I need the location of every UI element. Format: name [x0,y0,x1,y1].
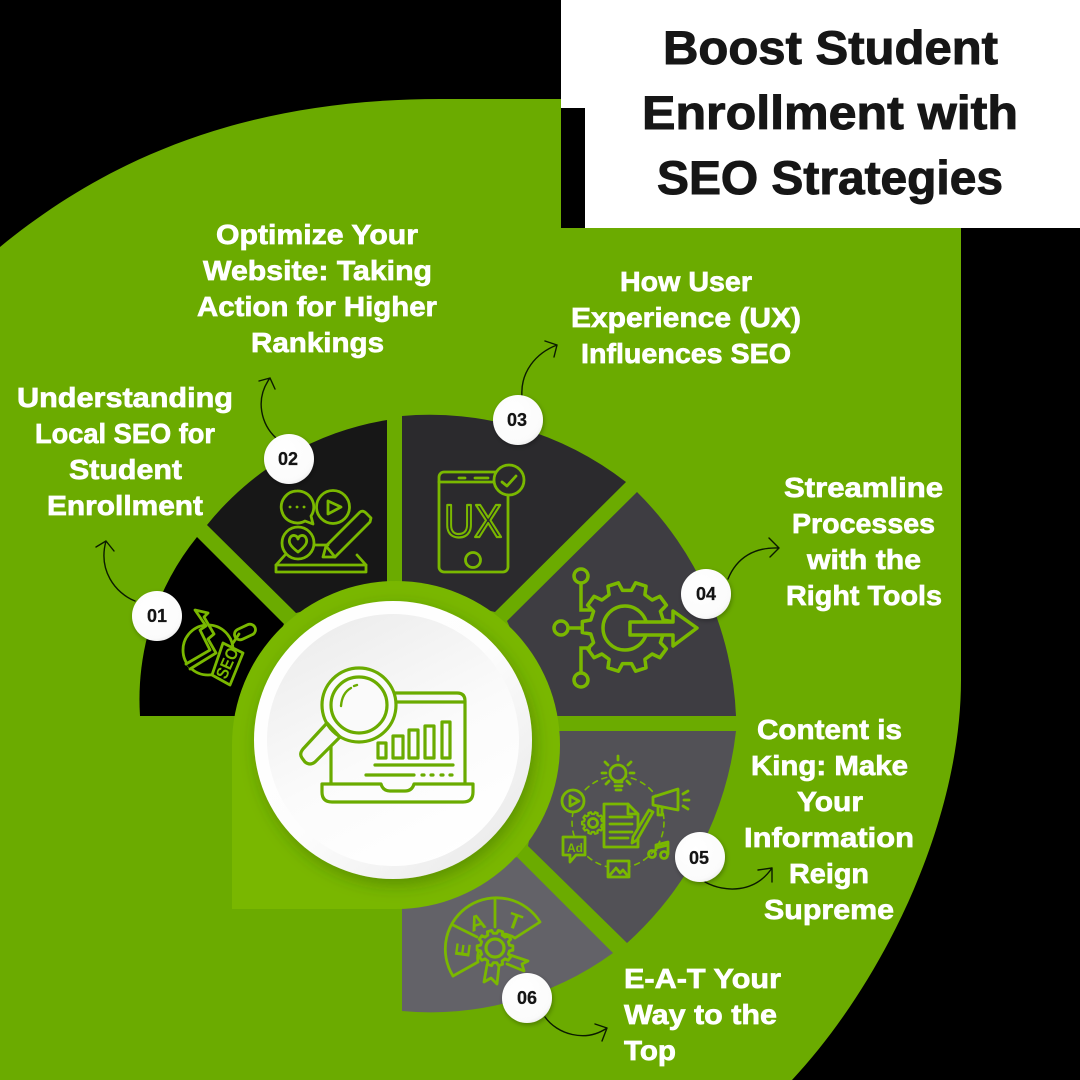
label 01: Enrollment [47,490,203,521]
label 03: How User [620,266,752,297]
label 03: Experience (UX) [571,302,801,333]
segment 06 [402,857,613,1012]
badge 01 [132,591,182,641]
label 01: Understanding [17,382,233,413]
badge 04: 04 [696,584,716,604]
label 05: Supreme [764,894,894,925]
arrow 05 [705,868,772,889]
icon: SEO growth [183,610,257,685]
label 04 [784,472,943,611]
label 01 [17,382,233,521]
icon: content marketing: Ad [567,841,583,855]
arrow 06 [545,1017,607,1041]
icon: content marketing [562,756,689,877]
label 06: Top [624,1035,676,1066]
title panel [561,0,1080,228]
label 05: Your [797,786,863,817]
icon: social content [276,490,371,572]
label 05: Information [744,822,914,853]
icon: E-A-T badge: A [466,908,489,937]
segment 02 [207,420,387,613]
label 06: Way to the [624,999,777,1030]
label 04: Right Tools [786,580,942,611]
label 05: Reign [789,858,869,889]
badge 05: 05 [689,848,709,868]
label 05 [744,714,914,925]
label 01: Student [69,454,182,485]
badge 05 [675,832,725,882]
label 02: Rankings [251,327,384,358]
icon: E-A-T badge: E [451,942,476,959]
label 02: Website: Taking [203,255,432,286]
central white circle [254,601,532,879]
label 02: Action for Higher [197,291,437,322]
label 04: Processes [792,508,935,539]
label 06: E-A-T Your [624,963,781,994]
title: Boost Student [663,21,998,74]
badge 06 [502,973,552,1023]
badge 06: 06 [517,988,537,1008]
label 05: King: Make [751,750,908,781]
segment 03 [402,415,626,612]
icon: SEO growth: SEO [212,645,243,682]
title: Enrollment with [642,86,1018,139]
arrow 01 [96,541,135,601]
badge 04 [681,569,731,619]
icon: UX phone [439,465,524,572]
label 01: Local SEO for [35,418,215,449]
label 03: Influences SEO [581,338,791,369]
label 02 [197,219,437,358]
label 02: Optimize Your [216,219,418,250]
segment 05 [528,731,736,943]
icon: E-A-T badge: T [504,907,526,935]
badge 02: 02 [278,449,298,469]
title [642,21,1018,204]
icon: laptop with magnifier [301,668,473,802]
label 04: Streamline [784,472,943,503]
label 05: Content is [757,714,902,745]
icon: UX phone: UX [444,495,502,547]
badge 02 [264,434,314,484]
icon: E-A-T badge [445,898,540,984]
arrow 04 [728,538,779,579]
central green teardrop [232,581,560,909]
title: SEO Strategies [657,151,1003,204]
arrow 03 [522,341,557,397]
segment 04 [507,492,736,716]
label 04: with the [806,544,921,575]
badge 03: 03 [507,410,527,430]
badge 03 [493,395,543,445]
label 03 [571,266,801,369]
label 06 [624,963,781,1066]
segment 01 [139,537,284,716]
icon: tools gear [554,569,697,687]
badge 01: 01 [147,606,167,626]
arrow 02 [259,378,276,438]
